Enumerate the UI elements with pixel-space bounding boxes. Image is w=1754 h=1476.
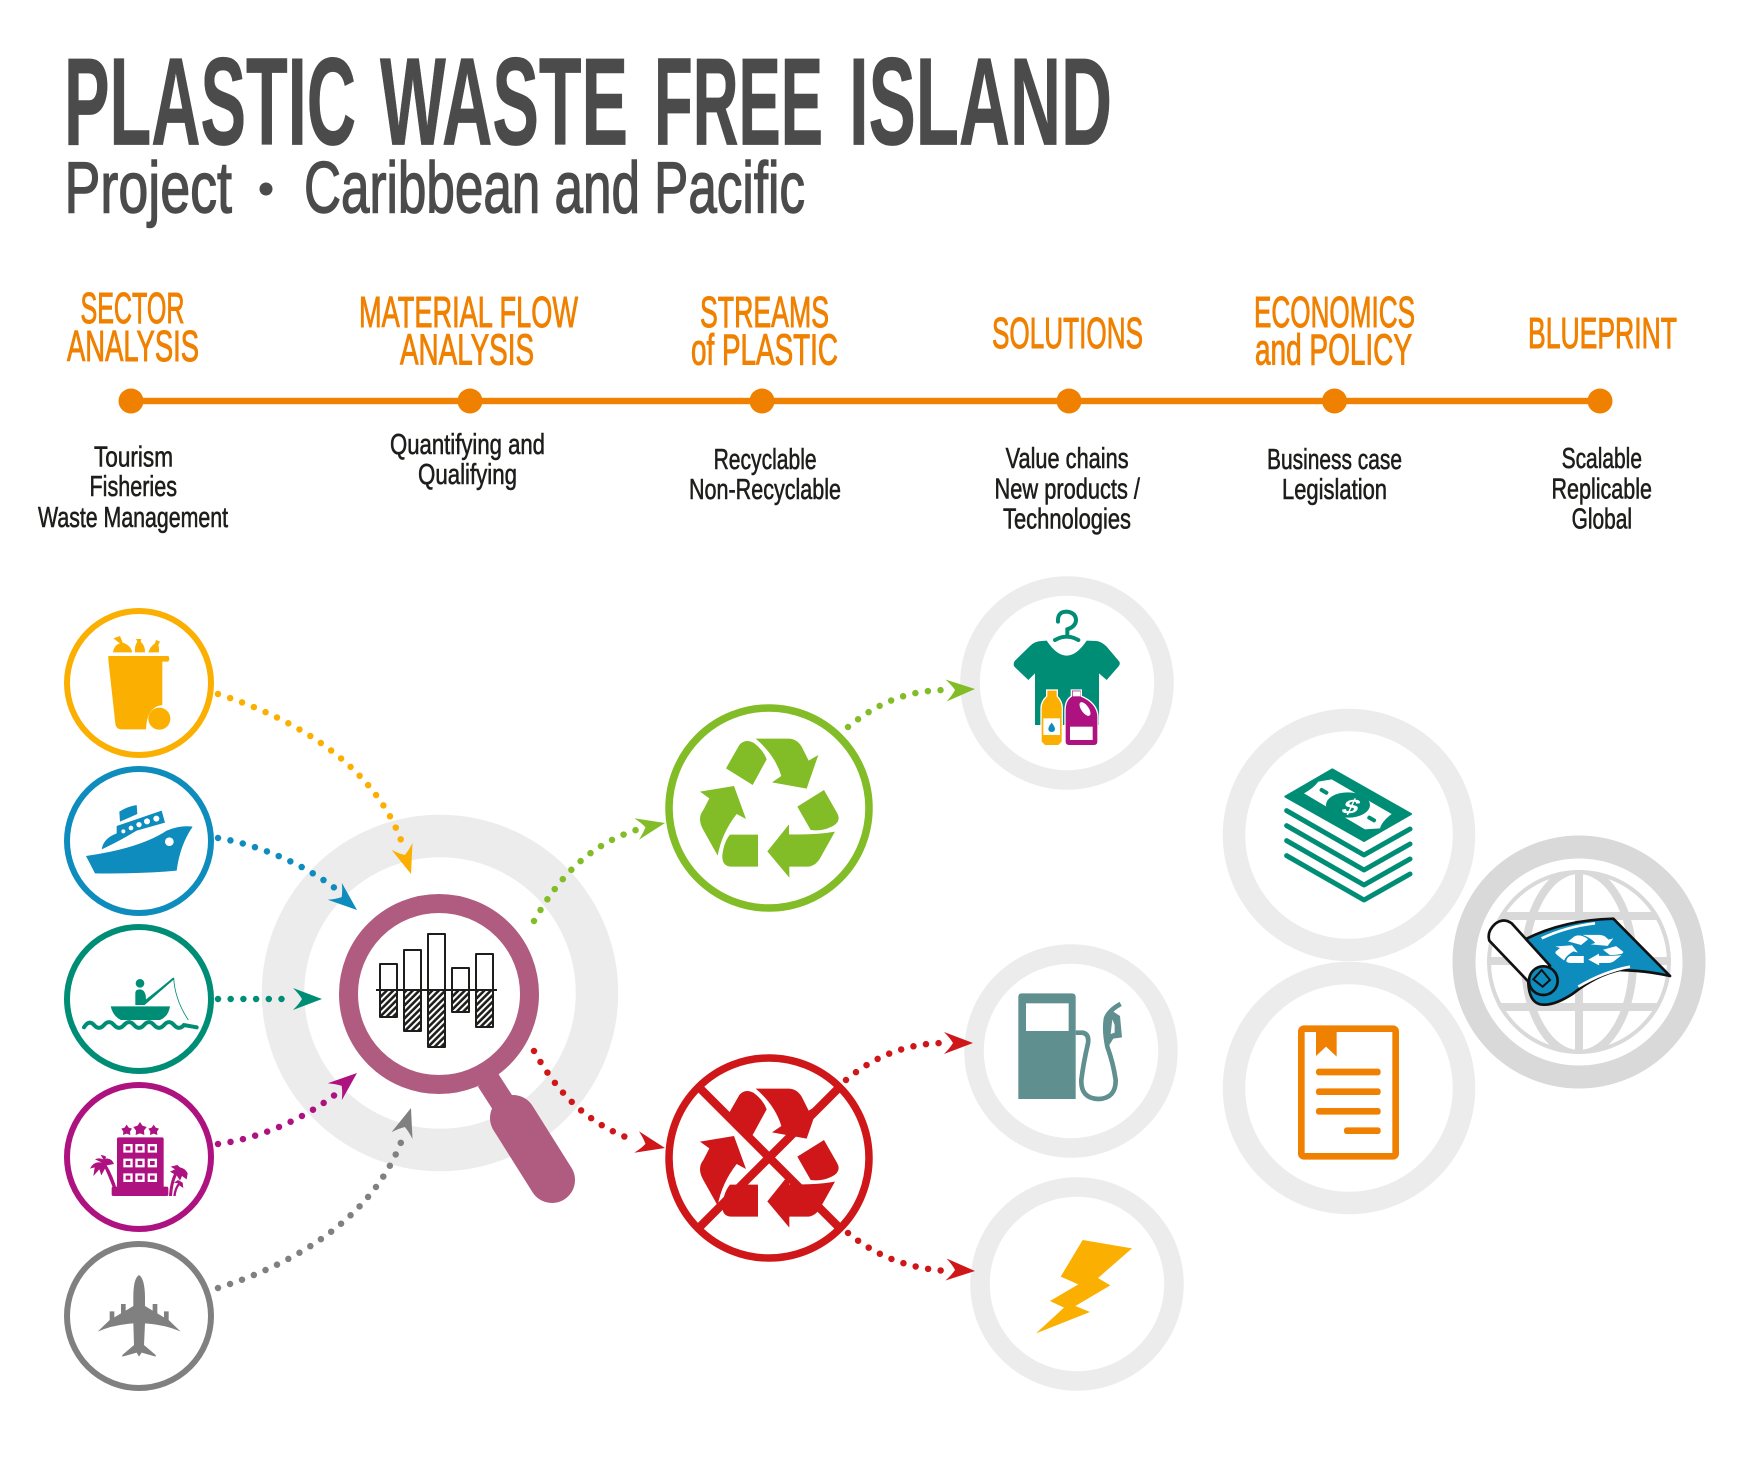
heading: sector analysis [67, 284, 199, 371]
text: value chains: Technologies [1003, 504, 1131, 536]
arrow: non-recyclable to energy [848, 1233, 976, 1282]
heading: material flow analysis: ANALYSIS [400, 326, 534, 374]
icon: stack of money: $ [1338, 796, 1364, 818]
text: value chains [994, 443, 1141, 536]
heading: material flow analysis [359, 288, 578, 374]
subtitle [64, 148, 805, 228]
text: recyclable [689, 444, 841, 506]
icon: airplane [67, 1244, 211, 1388]
text: sector list [38, 442, 228, 534]
icon: stack of money [1234, 720, 1464, 950]
text: recyclable: Recyclable [714, 444, 817, 476]
arrow: non-recyclable to fuel [846, 1032, 973, 1080]
icon: magnifying glass with bar chart [348, 904, 552, 1180]
heading: material flow analysis: MATERIAL FLOW [359, 288, 578, 337]
text: sector list: Tourism [94, 442, 173, 474]
text: business case [1267, 444, 1402, 506]
heading: economics and policy [1254, 288, 1415, 374]
text: business case: Legislation [1282, 474, 1387, 506]
text: value chains: New products / [994, 474, 1141, 506]
heading: sector analysis: SECTOR [80, 284, 184, 333]
timeline [118, 388, 1612, 414]
icon: non-recyclable [669, 1058, 869, 1258]
arrow: analysis to non-recyclable [534, 1051, 667, 1159]
text: quantifying: Quantifying and [390, 429, 545, 461]
icon: legislation document [1234, 973, 1464, 1203]
arrow: recyclable to products [848, 678, 976, 727]
icon: hotel with palms [67, 1085, 211, 1229]
text: quantifying: Qualifying [418, 459, 517, 491]
subtitle: Caribbean and Pacific [304, 148, 805, 228]
title: PLASTIC [64, 34, 356, 172]
subtitle: Project [64, 148, 232, 228]
text: business case: Business case [1267, 444, 1402, 476]
text: recyclable: Non-Recyclable [689, 474, 841, 506]
title [64, 34, 1112, 172]
text: scalable: Replicable [1552, 474, 1652, 506]
heading: economics and policy: ECONOMICS [1254, 288, 1415, 337]
text: value chains: Value chains [1006, 443, 1129, 475]
heading: streams of plastic: STREAMS [700, 288, 829, 337]
text: scalable: Scalable [1562, 443, 1642, 475]
text: scalable: Global [1572, 504, 1632, 536]
icon: clothes and bottles [970, 586, 1164, 780]
arrow: analysis to recyclable [534, 812, 667, 921]
title: FREE [654, 34, 823, 172]
icon: lightning bolt [980, 1187, 1174, 1381]
icon: fishing boat [67, 927, 211, 1071]
icon: waste bin [67, 611, 211, 755]
arrow: fishing to analysis [218, 988, 322, 1010]
heading: economics and policy: and POLICY [1255, 326, 1412, 374]
arrow: fisheries ship to analysis [218, 838, 364, 918]
icon: cruise ship [67, 769, 211, 913]
text: sector list: Fisheries [90, 471, 177, 503]
arrow: hotel to analysis [218, 1065, 364, 1144]
text: scalable [1552, 443, 1652, 536]
icon: fuel pump [974, 954, 1168, 1148]
heading: streams of plastic [691, 288, 838, 374]
panel: magnifier ring [283, 836, 597, 1150]
arrow: plane to analysis [218, 1105, 421, 1288]
title: WASTE [380, 34, 628, 172]
text: quantifying [390, 429, 545, 491]
title: ISLAND [849, 34, 1112, 172]
heading: solutions: SOLUTIONS [992, 309, 1143, 358]
icon: recyclable [669, 708, 869, 908]
icon: globe with blueprint [1464, 847, 1694, 1077]
heading: streams of plastic: of PLASTIC [691, 326, 838, 374]
arrow: waste to analysis [218, 694, 421, 877]
text: sector list: Waste Management [38, 502, 228, 534]
heading: sector analysis: ANALYSIS [67, 322, 199, 371]
